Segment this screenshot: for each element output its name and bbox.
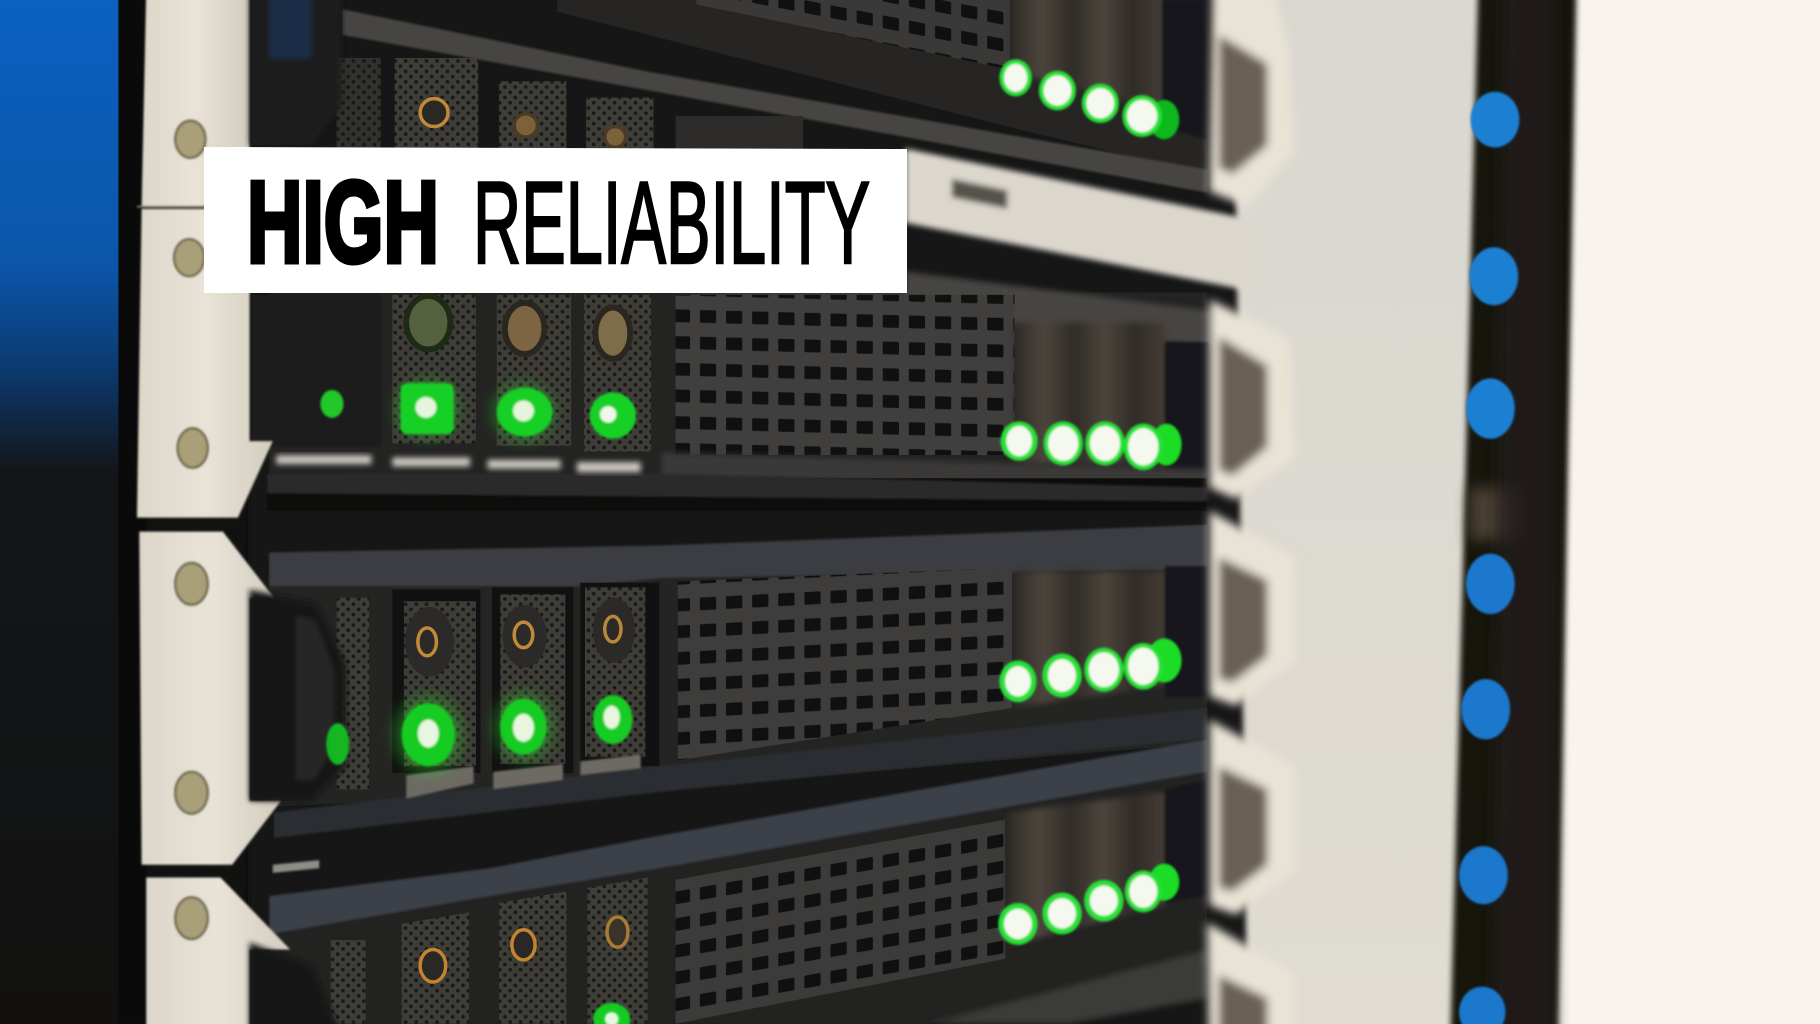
server row C: [253, 272, 1213, 511]
left blue rack side: [0, 0, 146, 1024]
icon: blue status lights: [1459, 92, 1519, 1024]
mounting screws: [174, 121, 208, 939]
server row B silver faceplate: [905, 149, 1258, 292]
icon: green status LED cluster row E: [998, 864, 1179, 945]
icon: green status LED cluster row D: [999, 638, 1182, 702]
title label: [204, 147, 907, 293]
icon: green status LED cluster row C: [1001, 421, 1182, 470]
right rack handles: [1207, 0, 1294, 1024]
far wall and blurred rack: [1230, 0, 1820, 1024]
server row E: [269, 739, 1209, 1024]
left mounting ears: [137, 0, 290, 1024]
row D drive LEDs: [393, 692, 633, 774]
server row D: [269, 525, 1209, 838]
server row A: [342, 0, 1207, 193]
title text: HIGH: HIGH: [247, 157, 439, 287]
drives above label: [337, 58, 803, 157]
rack dark body: [250, 0, 1248, 1024]
far-left row D LED: [326, 723, 349, 765]
title text: RELIABILITY: RELIABILITY: [473, 157, 870, 288]
server row F bottom: [929, 949, 1207, 1024]
black rack handles: [250, 0, 346, 1024]
row C drive LEDs: [320, 378, 636, 442]
icon: green status LED cluster row A: [999, 59, 1179, 139]
